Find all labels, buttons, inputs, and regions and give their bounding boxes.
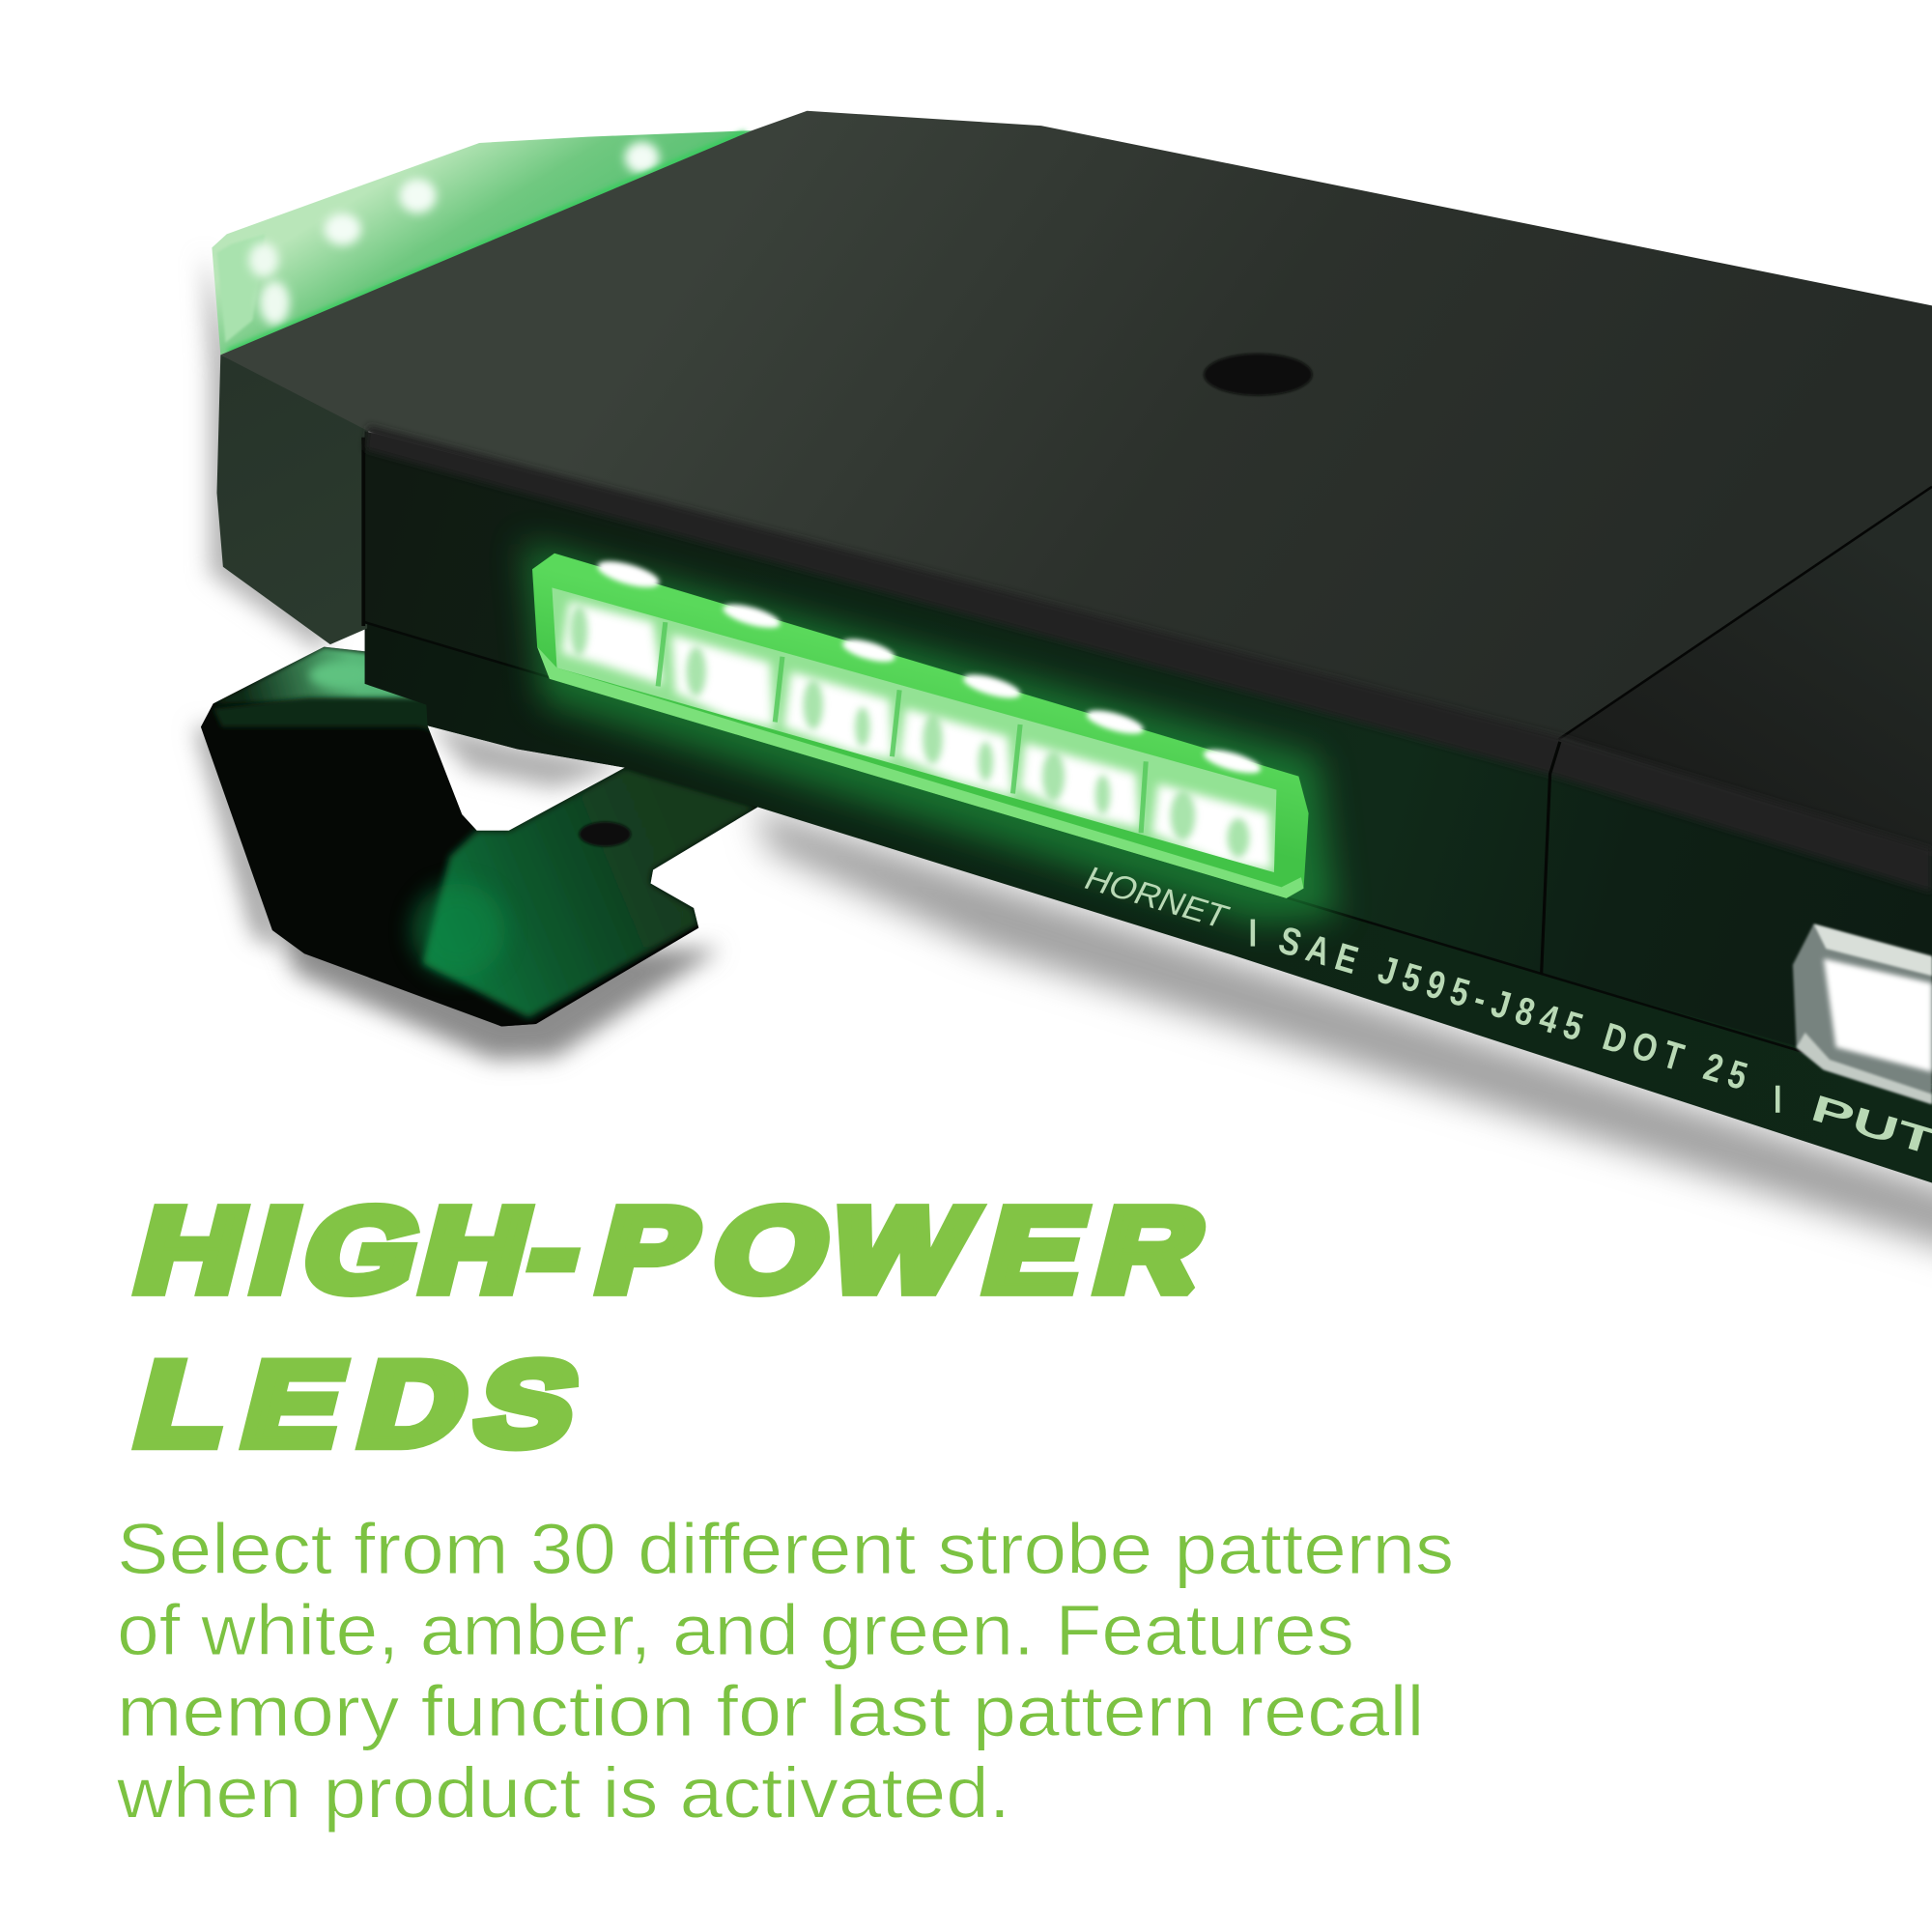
HORNET logo: HORNET <box>1078 861 1235 935</box>
PUTCO logo: PUT <box>1806 1088 1932 1164</box>
bracket opening <box>428 721 629 831</box>
heading <box>124 1184 1218 1470</box>
rail under front face <box>365 616 1932 1182</box>
body text: when product is activated. <box>116 1752 1010 1833</box>
green LED module <box>524 542 1337 924</box>
section seam <box>1542 742 1560 974</box>
lens facet mottling <box>571 607 1249 858</box>
top edge highlights <box>595 555 1263 778</box>
certification text: SAE J595-J845 DOT 25 <box>1274 918 1752 1098</box>
rounded front edge <box>365 425 1932 892</box>
cast shadows <box>195 252 1932 1293</box>
product photo: light bar <box>195 111 1932 1293</box>
mounting bracket <box>201 647 757 1030</box>
top surface: right section <box>1561 487 1932 856</box>
white LED module <box>1793 924 1932 1104</box>
body text: Select from 30 different strobe patterns <box>117 1509 1454 1589</box>
lens dividers <box>658 622 1146 833</box>
body text <box>116 1509 1454 1833</box>
bracket mounting hole <box>579 822 631 846</box>
body text: memory function for last pattern recall <box>117 1671 1424 1751</box>
left chamfer face <box>216 355 368 644</box>
body text: of white, amber, and green. Features <box>117 1590 1354 1670</box>
divider bar <box>1251 920 1255 947</box>
top surface: left section <box>220 111 1932 856</box>
heading: LEDS <box>124 1339 591 1470</box>
mounting hole <box>1204 354 1312 395</box>
front face <box>365 431 1932 1084</box>
heading: HIGH-POWER <box>124 1184 1218 1317</box>
rail lettering <box>1078 861 1932 1164</box>
divider bar <box>1776 1086 1779 1113</box>
lens hot spots <box>562 601 1271 870</box>
green end cap lens <box>212 130 752 355</box>
